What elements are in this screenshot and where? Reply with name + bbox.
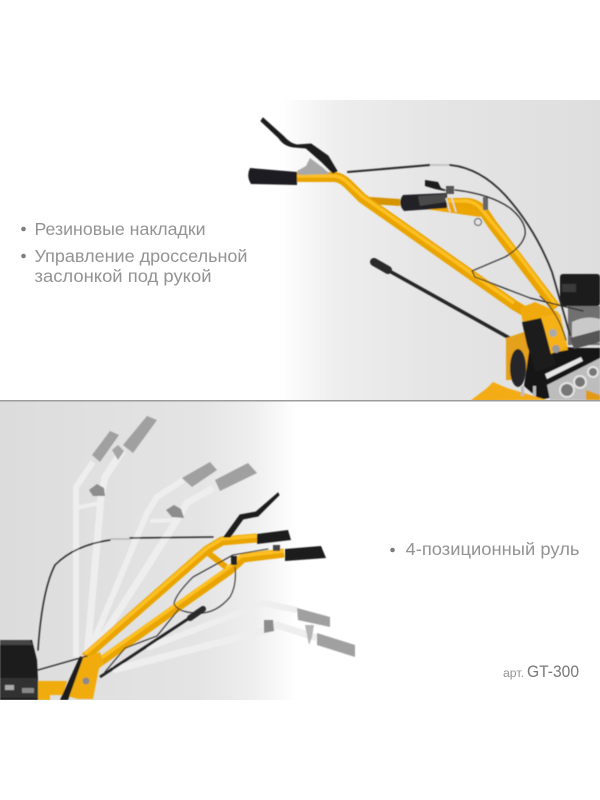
throttle lever xyxy=(425,180,488,226)
bullet list: top features xyxy=(21,219,248,286)
panel: bottom handle photo background xyxy=(0,401,600,700)
yellow frame xyxy=(38,681,67,700)
bullet xyxy=(21,227,26,231)
gear lever xyxy=(98,618,188,679)
cables xyxy=(38,537,280,672)
bullet list: bottom feature xyxy=(390,539,580,559)
brake lever xyxy=(224,493,279,537)
bullet xyxy=(21,254,26,258)
bullet xyxy=(390,548,395,552)
text: throttle control second line: заслонкой под рукой xyxy=(34,266,212,286)
ghost position: low xyxy=(113,603,355,670)
article code: GT-300 xyxy=(527,663,579,681)
text: rubber grips: Резиновые накладки xyxy=(34,219,206,239)
divider line between panels xyxy=(0,400,600,402)
yellow handle tubes xyxy=(297,176,568,372)
right rubber grip xyxy=(400,193,447,211)
brake lever xyxy=(261,118,337,175)
gear lever xyxy=(374,262,522,345)
cables xyxy=(348,165,583,340)
grip highlight xyxy=(418,194,446,206)
ghost position: forward xyxy=(87,462,257,657)
engine and transmission xyxy=(470,274,600,401)
text: four-position handle: 4-позиционный руль xyxy=(406,539,580,559)
panel: top handle photo background xyxy=(0,100,600,400)
left rubber grip xyxy=(248,168,297,185)
text: throttle control: Управление дроссельной xyxy=(34,246,248,266)
lever knob xyxy=(190,609,203,618)
ghost position: upright xyxy=(76,416,157,657)
engine block xyxy=(0,640,39,700)
photo: tiller handle with rubber grips xyxy=(248,118,600,401)
photo: handle in four positions xyxy=(0,416,355,700)
article label: арт. xyxy=(503,666,524,680)
upper grip xyxy=(257,530,291,544)
article number xyxy=(503,663,579,681)
yellow handle tubes xyxy=(60,536,284,700)
lower grip xyxy=(285,546,326,561)
